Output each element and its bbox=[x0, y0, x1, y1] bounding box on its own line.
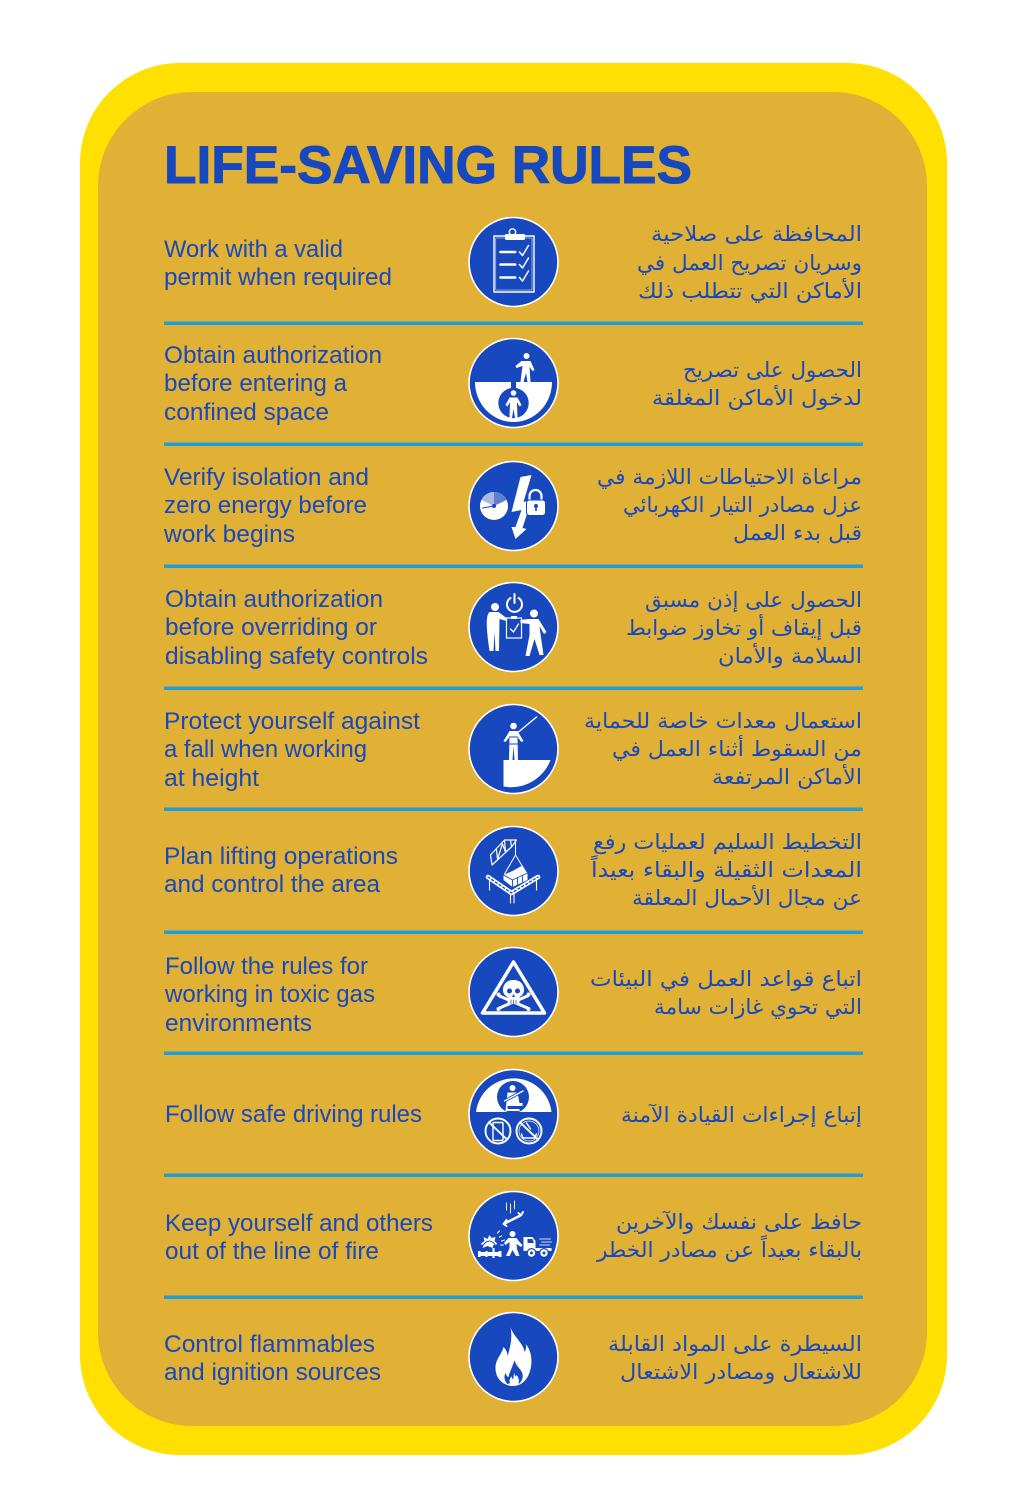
rule 9 English text: out of the line of fire bbox=[165, 1238, 379, 1265]
rule 4 Arabic text: السلامة والأمان bbox=[718, 643, 862, 668]
rule 8 Arabic text: إتباع إجراءات القيادة الآمنة bbox=[621, 1103, 862, 1128]
rule 4 Arabic text: الحصول على إذن مسبق bbox=[645, 588, 862, 613]
icon: gauge, lightning bolt and padlock bbox=[469, 462, 558, 550]
rule 7 English text: working in toxic gas bbox=[164, 981, 375, 1008]
rule 3 Arabic text: عزل مصادر التيار الكهربائي bbox=[623, 493, 862, 517]
rule 6 English text: Plan lifting operations bbox=[164, 843, 398, 870]
rule 1 Arabic text bbox=[637, 222, 862, 303]
rule 7 Arabic text bbox=[590, 967, 862, 1019]
rule 5 Arabic text: استعمال معدات خاصة للحماية bbox=[584, 709, 862, 733]
rule 9 Arabic text: بالبقاء بعيداً عن مصادر الخطر bbox=[596, 1234, 862, 1262]
rule 2 English text bbox=[164, 342, 382, 426]
rule 3 Arabic text bbox=[597, 465, 862, 545]
icon: harnessed worker on a ledge bbox=[469, 704, 558, 794]
rule 3 Arabic text: مراعاة الاحتياطات اللازمة في bbox=[597, 465, 862, 489]
rule 3 English text bbox=[163, 464, 369, 548]
rule 10 English text: Control flammables bbox=[164, 1331, 375, 1358]
rule 8 English text: Follow safe driving rules bbox=[165, 1101, 422, 1128]
rule 3: isolation and zero energy bbox=[163, 462, 862, 550]
rule 3 English text: zero energy before bbox=[164, 492, 367, 519]
rule 7 Arabic text: التي تحوي غازات سامة bbox=[654, 995, 862, 1019]
rule 9 Arabic text bbox=[596, 1210, 862, 1262]
title: LIFE-SAVING RULES bbox=[164, 136, 692, 195]
rule 4 Arabic text bbox=[626, 588, 862, 668]
rule 6 Arabic text: المعدات الثقيلة والبقاء بعيداً bbox=[591, 854, 862, 882]
rule 5 English text bbox=[164, 708, 420, 792]
rule 10 Arabic text: السيطرة على المواد القابلة bbox=[608, 1332, 862, 1356]
icon: two people, clipboard and power symbol bbox=[469, 582, 558, 672]
rule 3 English text: work begins bbox=[163, 521, 295, 548]
rule 1 English text bbox=[164, 236, 392, 291]
rule 1: valid work permit bbox=[164, 218, 862, 306]
rule 3 Arabic text: قبل بدء العمل bbox=[733, 521, 862, 545]
icon: flame bbox=[469, 1312, 558, 1402]
rule 2 Arabic text: الحصول على تصريح bbox=[683, 358, 862, 382]
rule 9 English text: Keep yourself and others bbox=[165, 1210, 433, 1237]
rule 1 English text: permit when required bbox=[164, 264, 392, 291]
rule 5: working at height bbox=[164, 704, 862, 794]
rule 8: safe driving bbox=[165, 1070, 862, 1158]
rule 7 English text: Follow the rules for bbox=[165, 953, 368, 980]
rule 9: line of fire bbox=[165, 1192, 862, 1280]
icon: seatbelt, no phone and no smoking bbox=[469, 1070, 558, 1158]
rule 1 Arabic text: المحافظة على صلاحية bbox=[651, 222, 862, 246]
rule 9 English text bbox=[165, 1210, 433, 1265]
icon: falling wrench, explosion, worker and truck bbox=[469, 1192, 558, 1280]
rule 4: overriding safety controls bbox=[165, 582, 862, 672]
icon: person entering confined space bbox=[469, 338, 558, 428]
rule 10 Arabic text bbox=[608, 1332, 862, 1384]
rule 5 English text: at height bbox=[164, 765, 259, 792]
rule 7 Arabic text: اتباع قواعد العمل في البيئات bbox=[590, 967, 862, 991]
rule 9 Arabic text: حافظ على نفسك والآخرين bbox=[616, 1210, 862, 1234]
icon: clipboard checklist bbox=[469, 218, 558, 306]
rule 4 Arabic text: قبل إيقاف أو تخاوز ضوابط bbox=[626, 614, 862, 641]
rule 6 English text bbox=[164, 843, 398, 898]
rule 2 English text: Obtain authorization bbox=[164, 342, 382, 369]
rule 4 English text: before overriding or bbox=[165, 614, 377, 641]
rule 4 English text: disabling safety controls bbox=[165, 643, 428, 670]
rule 4 English text bbox=[165, 586, 428, 670]
rule 2 Arabic text bbox=[652, 358, 862, 410]
rule 10: flammables bbox=[164, 1312, 862, 1402]
rule 1 Arabic text: وسريان تصريح العمل في bbox=[637, 251, 862, 275]
rule 2 English text: before entering a bbox=[164, 370, 347, 397]
rule 2 English text: confined space bbox=[164, 399, 329, 426]
rule 6: lifting operations bbox=[164, 826, 862, 916]
rule 10 English text: and ignition sources bbox=[164, 1359, 381, 1386]
rule 2 Arabic text: لدخول الأماكن المغلقة bbox=[652, 385, 862, 410]
rule 4 English text: Obtain authorization bbox=[165, 586, 383, 613]
rule 3 English text: Verify isolation and bbox=[164, 464, 369, 491]
rule 5 English text: a fall when working bbox=[164, 736, 367, 763]
rule 6 English text: and control the area bbox=[164, 871, 380, 898]
rule 6 Arabic text: التخطيط السليم لعمليات رفع bbox=[593, 830, 862, 855]
rule 1 English text: Work with a valid bbox=[164, 236, 343, 263]
rule 2: confined space bbox=[164, 338, 862, 428]
rule 7 English text bbox=[164, 953, 375, 1037]
icon: skull and crossbones in triangle bbox=[469, 948, 558, 1036]
rule 5 Arabic text: من السقوط أثناء العمل في bbox=[612, 735, 862, 761]
icon: crane load and barricade bbox=[469, 826, 558, 916]
rule 10 English text bbox=[164, 1331, 381, 1386]
panel: yellow outer frame bbox=[80, 63, 947, 1455]
rule 10 Arabic text: للاشتعال ومصادر الاشتعال bbox=[620, 1360, 862, 1384]
rule 7 English text: environments bbox=[165, 1010, 312, 1037]
rule 7: toxic gas bbox=[164, 948, 862, 1037]
rule 5 English text: Protect yourself against bbox=[164, 708, 420, 735]
rule 6 Arabic text: عن مجال الأحمال المعلقة bbox=[632, 885, 862, 910]
rule 1 Arabic text: الأماكن التي تتطلب ذلك bbox=[638, 278, 862, 303]
panel: ochre inner card bbox=[98, 92, 927, 1426]
rule 6 Arabic text bbox=[591, 830, 862, 910]
rule 5 Arabic text bbox=[584, 709, 862, 789]
rule 5 Arabic text: الأماكن المرتفعة bbox=[712, 764, 862, 789]
